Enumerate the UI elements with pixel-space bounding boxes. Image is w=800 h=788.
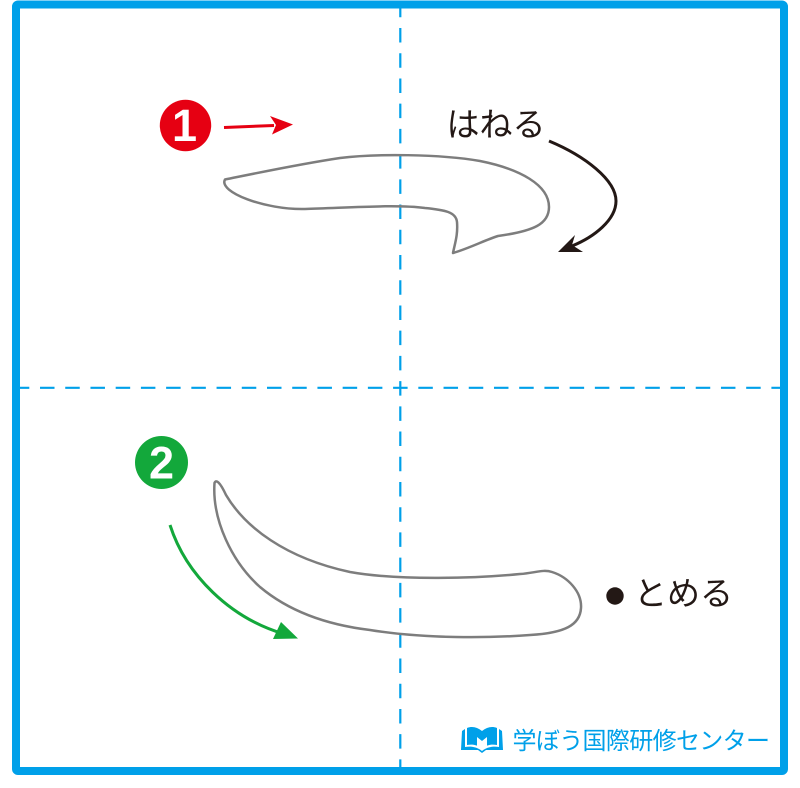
arrow: green stroke direction [170,525,298,639]
badge: number 2 [135,436,188,489]
icon: open book [461,727,503,753]
badge: number 1: 1 [172,100,197,151]
logo: 学ぼう国際研修センター [461,727,770,755]
arrow: red stroke direction [224,116,293,134]
stroke outline: second stroke with tome [214,481,581,637]
label: とめる: とめる [634,575,733,612]
arrow: hane direction [549,141,616,252]
stroke outline: first stroke with hane [224,155,549,253]
bullet point [606,587,624,605]
label: はねる: はねる [446,106,546,143]
badge: number 2: 2 [149,438,174,488]
badge: number 1 [160,100,211,151]
logo text: 学ぼう国際研修センター [512,728,770,755]
